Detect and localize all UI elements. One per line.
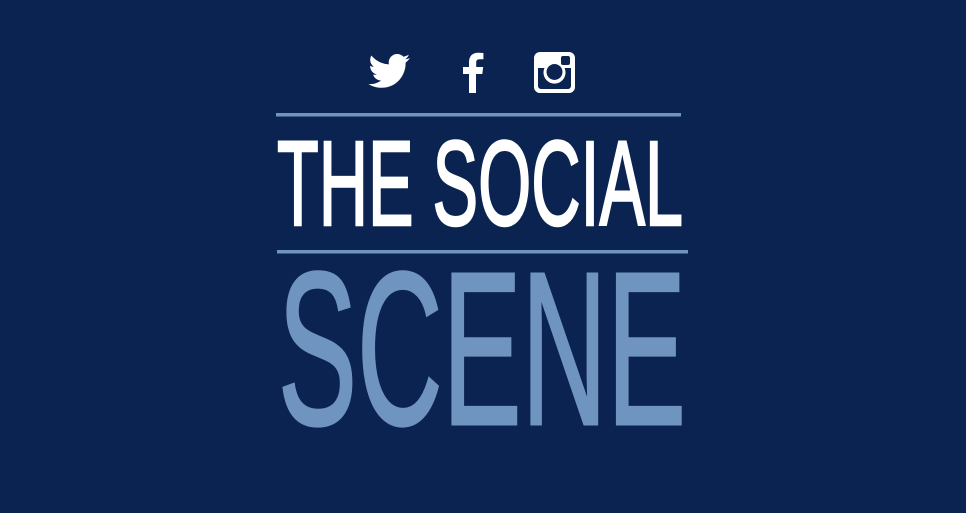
middle rule: [277, 250, 688, 254]
icon: twitter: [368, 54, 410, 88]
icon: instagram: [534, 52, 575, 93]
icon: facebook: [463, 53, 483, 93]
top rule: [276, 113, 681, 116]
